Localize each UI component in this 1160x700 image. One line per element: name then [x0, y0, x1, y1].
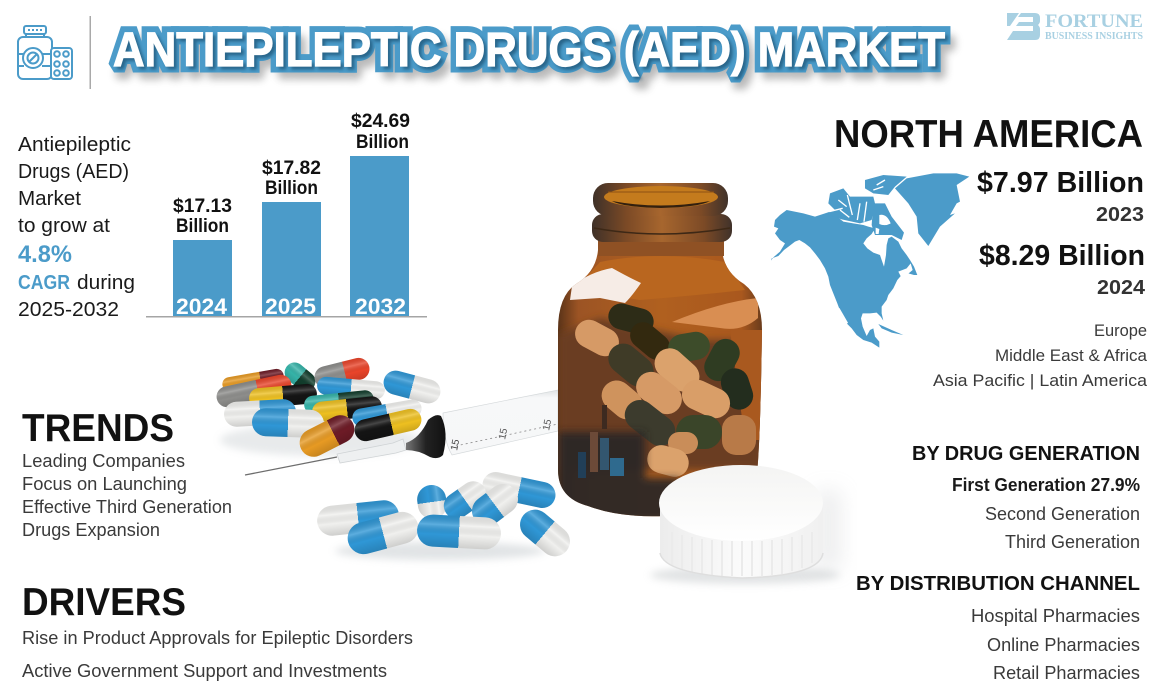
region: North America map [771, 173, 969, 348]
title: ANTIEPILEPTIC DRUGS (AED) MARKET [113, 24, 945, 77]
photo: white bottle cap [650, 465, 841, 584]
bar 2032 [350, 111, 410, 319]
other regions list: Middle East & Africa [995, 346, 1148, 365]
panel: drivers [22, 581, 413, 681]
segment: by distribution channel: Online Pharmacies [987, 635, 1140, 655]
panel: drivers: Active Government Support and Investments [22, 661, 387, 681]
logo: Fortune Business Insights [1007, 11, 1143, 42]
growth text block: Drugs (AED) [18, 161, 129, 183]
segment: by distribution channel: BY DISTRIBUTION CHANNEL [856, 573, 1140, 595]
photo: syringe [245, 390, 558, 475]
bar 2032: $24.69 [351, 111, 410, 132]
segment: by drug generation: BY DRUG GENERATION [912, 443, 1140, 465]
bar 2024: 2024 [176, 294, 228, 319]
bar 2025: $17.82 [262, 158, 321, 179]
logo: Fortune Business Insights: BUSINESS INSIGHTS [1045, 31, 1143, 42]
logo: Fortune Business Insights: FORTUNE [1045, 11, 1143, 32]
segment: by drug generation: Third Generation [1005, 532, 1140, 552]
bar 2032: Billion [356, 132, 409, 153]
photo: blue and white capsules [316, 470, 576, 562]
photo: syringe: 15 [541, 418, 554, 432]
growth text block: 4.8% [18, 241, 72, 268]
panel: trends: Focus on Launching [22, 474, 187, 494]
heading: North America: NORTH AMERICA [834, 113, 1143, 156]
bar 2024 [173, 196, 232, 319]
pills inside bottle [570, 300, 757, 480]
North America values: $8.29 Billion [979, 240, 1145, 272]
growth text block: to grow at [18, 215, 110, 237]
photo: syringe: 15 [497, 427, 510, 441]
bar 2025: Billion [265, 178, 318, 199]
panel: trends: TRENDS [22, 407, 174, 450]
segment: by drug generation: Second Generation [985, 504, 1140, 524]
panel: drivers: Rise in Product Approvals for Epileptic Disorders [22, 628, 413, 648]
North America values: 2023 [1096, 204, 1144, 226]
segment: by distribution channel [856, 573, 1140, 683]
growth text block: Market [18, 188, 81, 210]
bar 2024: $17.13 [173, 196, 232, 217]
segment: by distribution channel: Retail Pharmacies [993, 663, 1140, 683]
photo: amber pill bottle [558, 183, 762, 522]
growth text block: CAGR [18, 272, 70, 294]
North America values: $7.97 Billion [977, 167, 1144, 199]
growth text block: Antiepileptic [18, 134, 131, 156]
North America values: 2024 [1097, 277, 1146, 299]
panel: drivers: DRIVERS [22, 581, 186, 624]
bar 2025 [262, 158, 321, 319]
segment: by drug generation: First Generation 27.9% [952, 475, 1140, 495]
segment: by distribution channel: Hospital Pharmacies [971, 606, 1140, 626]
North America values [977, 167, 1146, 299]
title: ANTIEPILEPTIC DRUGS (AED) MARKET [113, 24, 945, 77]
segment: by drug generation [912, 443, 1140, 552]
icon: medicine bottle and blister pack [18, 26, 72, 79]
title: ANTIEPILEPTIC DRUGS (AED) MARKET [116, 27, 948, 80]
other regions list: Asia Pacific | Latin America [933, 371, 1148, 390]
bar 2032: 2032 [355, 294, 406, 319]
photo: syringe: 15 [449, 438, 462, 452]
growth text block: during [77, 272, 135, 294]
panel: trends: Leading Companies [22, 451, 185, 471]
photo: colored capsules pile [215, 356, 443, 462]
panel: trends: Drugs Expansion [22, 520, 160, 540]
panel: trends [22, 407, 232, 540]
bar 2025: 2025 [265, 294, 316, 319]
title: ANTIEPILEPTIC DRUGS (AED) MARKET [119, 32, 951, 85]
header divider [90, 16, 91, 89]
growth text block: 2025-2032 [18, 299, 119, 321]
bar chart [146, 111, 427, 319]
other regions list: Europe [1094, 321, 1147, 340]
panel: trends: Effective Third Generation [22, 497, 232, 517]
growth text block [18, 134, 135, 321]
other regions list [933, 321, 1148, 390]
bar 2024: Billion [176, 216, 229, 237]
